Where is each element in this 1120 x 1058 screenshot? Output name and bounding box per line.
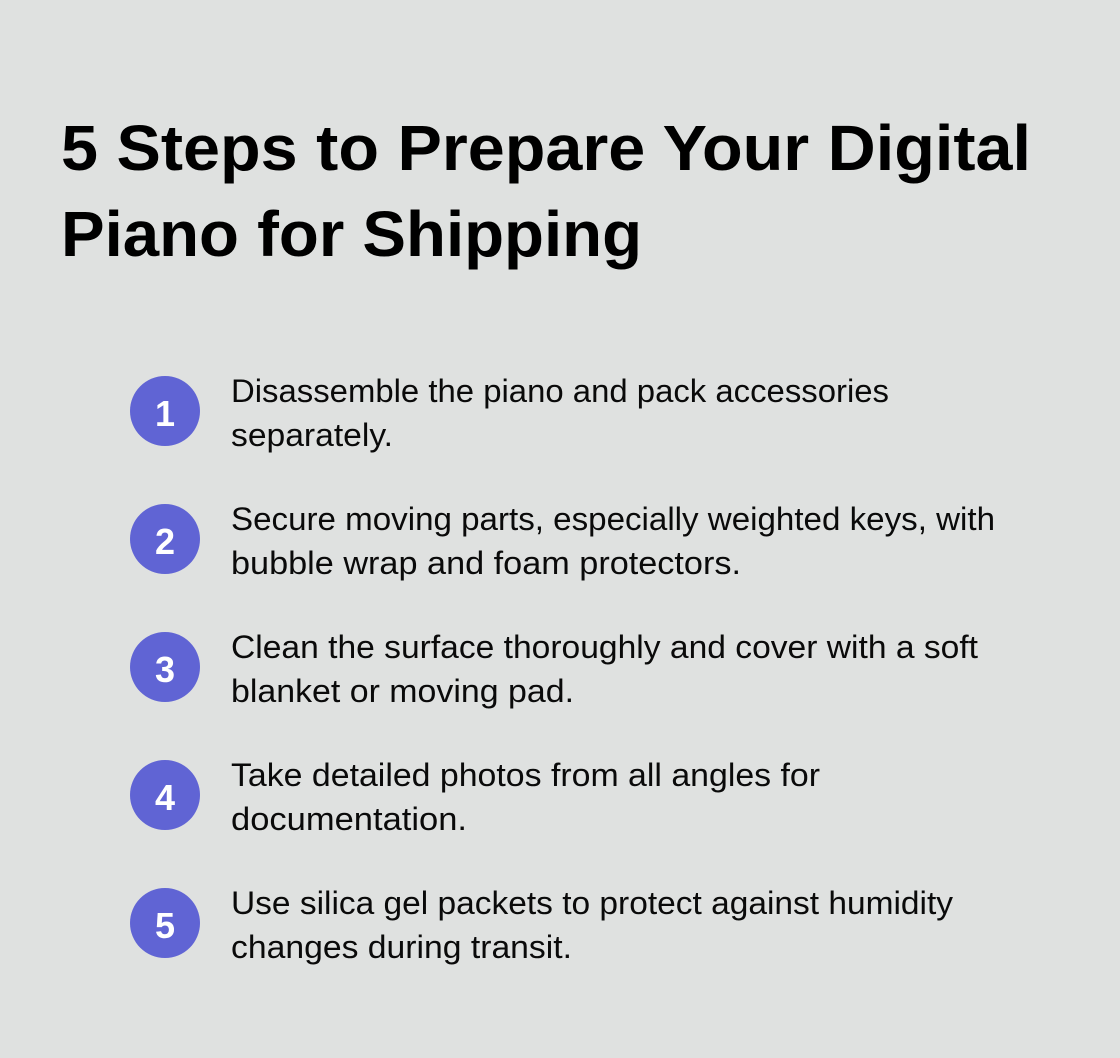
number badge 3: 3 bbox=[155, 649, 175, 690]
step 1 bbox=[130, 373, 889, 453]
number badge 2: 2 bbox=[155, 521, 175, 562]
number badge 1 bbox=[130, 376, 200, 446]
number badge 3 bbox=[130, 632, 200, 702]
step 5 text: changes during transit. bbox=[231, 929, 572, 965]
step 2 text: bubble wrap and foam protectors. bbox=[231, 545, 741, 581]
title: 5 Steps to Prepare Your Digital bbox=[61, 112, 1031, 184]
title: Piano for Shipping bbox=[61, 198, 642, 270]
step 3 bbox=[130, 629, 978, 709]
number badge 1: 1 bbox=[155, 393, 175, 434]
step 3 text: Clean the surface thoroughly and cover with a soft bbox=[231, 629, 978, 665]
step 5 text bbox=[231, 885, 953, 965]
step 4 text bbox=[231, 757, 820, 837]
step 2 text: Secure moving parts, especially weighted keys, with bbox=[231, 501, 995, 537]
number badge 5 bbox=[130, 888, 200, 958]
step 1 text: Disassemble the piano and pack accessories bbox=[231, 373, 889, 409]
number badge 5: 5 bbox=[155, 905, 175, 946]
step 1 text: separately. bbox=[231, 417, 393, 453]
step 4 bbox=[130, 757, 820, 837]
step 5 text: Use silica gel packets to protect against humidity bbox=[231, 885, 953, 921]
step 4 text: documentation. bbox=[231, 801, 467, 837]
step 4 text: Take detailed photos from all angles for bbox=[231, 757, 820, 793]
number badge 4: 4 bbox=[155, 777, 175, 818]
step 2 bbox=[130, 501, 995, 581]
step 3 text: blanket or moving pad. bbox=[231, 673, 574, 709]
step 2 text bbox=[231, 501, 995, 581]
step 3 text bbox=[231, 629, 978, 709]
number badge 4 bbox=[130, 760, 200, 830]
step 1 text bbox=[231, 373, 889, 453]
title bbox=[61, 112, 1031, 270]
step 5 bbox=[130, 885, 953, 965]
number badge 2 bbox=[130, 504, 200, 574]
